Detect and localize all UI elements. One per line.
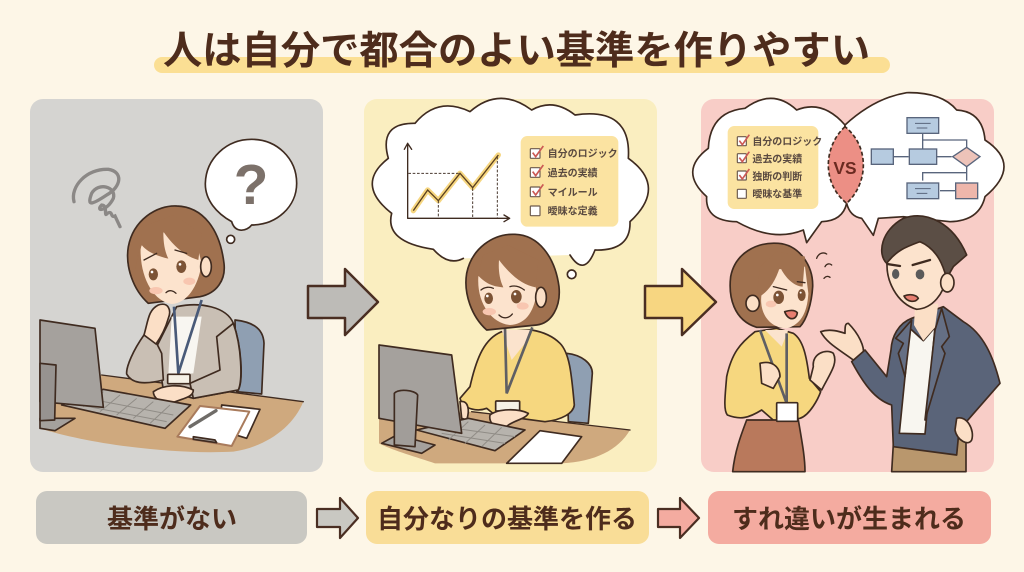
- label: mismatch: すれ違いが生まれる: [732, 504, 966, 534]
- checklist: [728, 126, 822, 209]
- title: 人は自分で都合のよい基準を作りやすい: [163, 30, 870, 73]
- checklist: 自分のロジック: [548, 147, 618, 160]
- small arrow: gray: [317, 498, 358, 538]
- chair: [567, 353, 592, 423]
- person: worried woman: [127, 206, 241, 405]
- label: own standard: [366, 491, 649, 544]
- clipboard and pen: [177, 405, 260, 446]
- label: mismatch: [708, 491, 991, 544]
- label: no standard: [36, 491, 307, 544]
- checklist: 過去の実績: [548, 167, 598, 180]
- checklist: 独断の判断: [752, 170, 802, 183]
- checklist: 曖昧な定義: [548, 205, 598, 218]
- checklist: マイルール: [548, 187, 598, 199]
- speech cloud: man: [845, 93, 1004, 235]
- icon: tangled scribble: [73, 169, 120, 227]
- checklist: 曖昧な基準: [752, 188, 802, 201]
- checklist: 自分のロジック: [752, 135, 822, 148]
- desk: [40, 373, 303, 452]
- person: man: [821, 216, 1000, 472]
- label: own standard: 自分なりの基準を作る: [377, 504, 637, 534]
- computer: [379, 345, 525, 453]
- flowchart: [871, 118, 980, 199]
- arrow: gray: [308, 269, 378, 335]
- speech cloud: woman: [693, 98, 847, 243]
- label: no standard: 基準がない: [107, 504, 237, 534]
- panel: mismatch: [693, 93, 1004, 472]
- arrow: yellow: [645, 269, 716, 335]
- thought bubble: question: [205, 139, 297, 243]
- person: smiling woman: [460, 234, 574, 429]
- thought cloud: [372, 98, 648, 279]
- checklist: 過去の実績: [752, 153, 802, 166]
- desk: [379, 412, 630, 463]
- checklist: [521, 136, 618, 227]
- person: woman: [725, 243, 835, 472]
- chair: [235, 320, 264, 394]
- thought bubble: question: ?: [234, 154, 268, 217]
- line chart: [404, 143, 510, 222]
- computer: [40, 320, 191, 431]
- panel: own standard: [364, 98, 657, 472]
- panel: no standard: [30, 99, 323, 472]
- vs badge: VS: [833, 158, 857, 178]
- notebook: [507, 431, 582, 463]
- vs badge: [828, 127, 863, 203]
- small arrow: pink: [658, 498, 699, 538]
